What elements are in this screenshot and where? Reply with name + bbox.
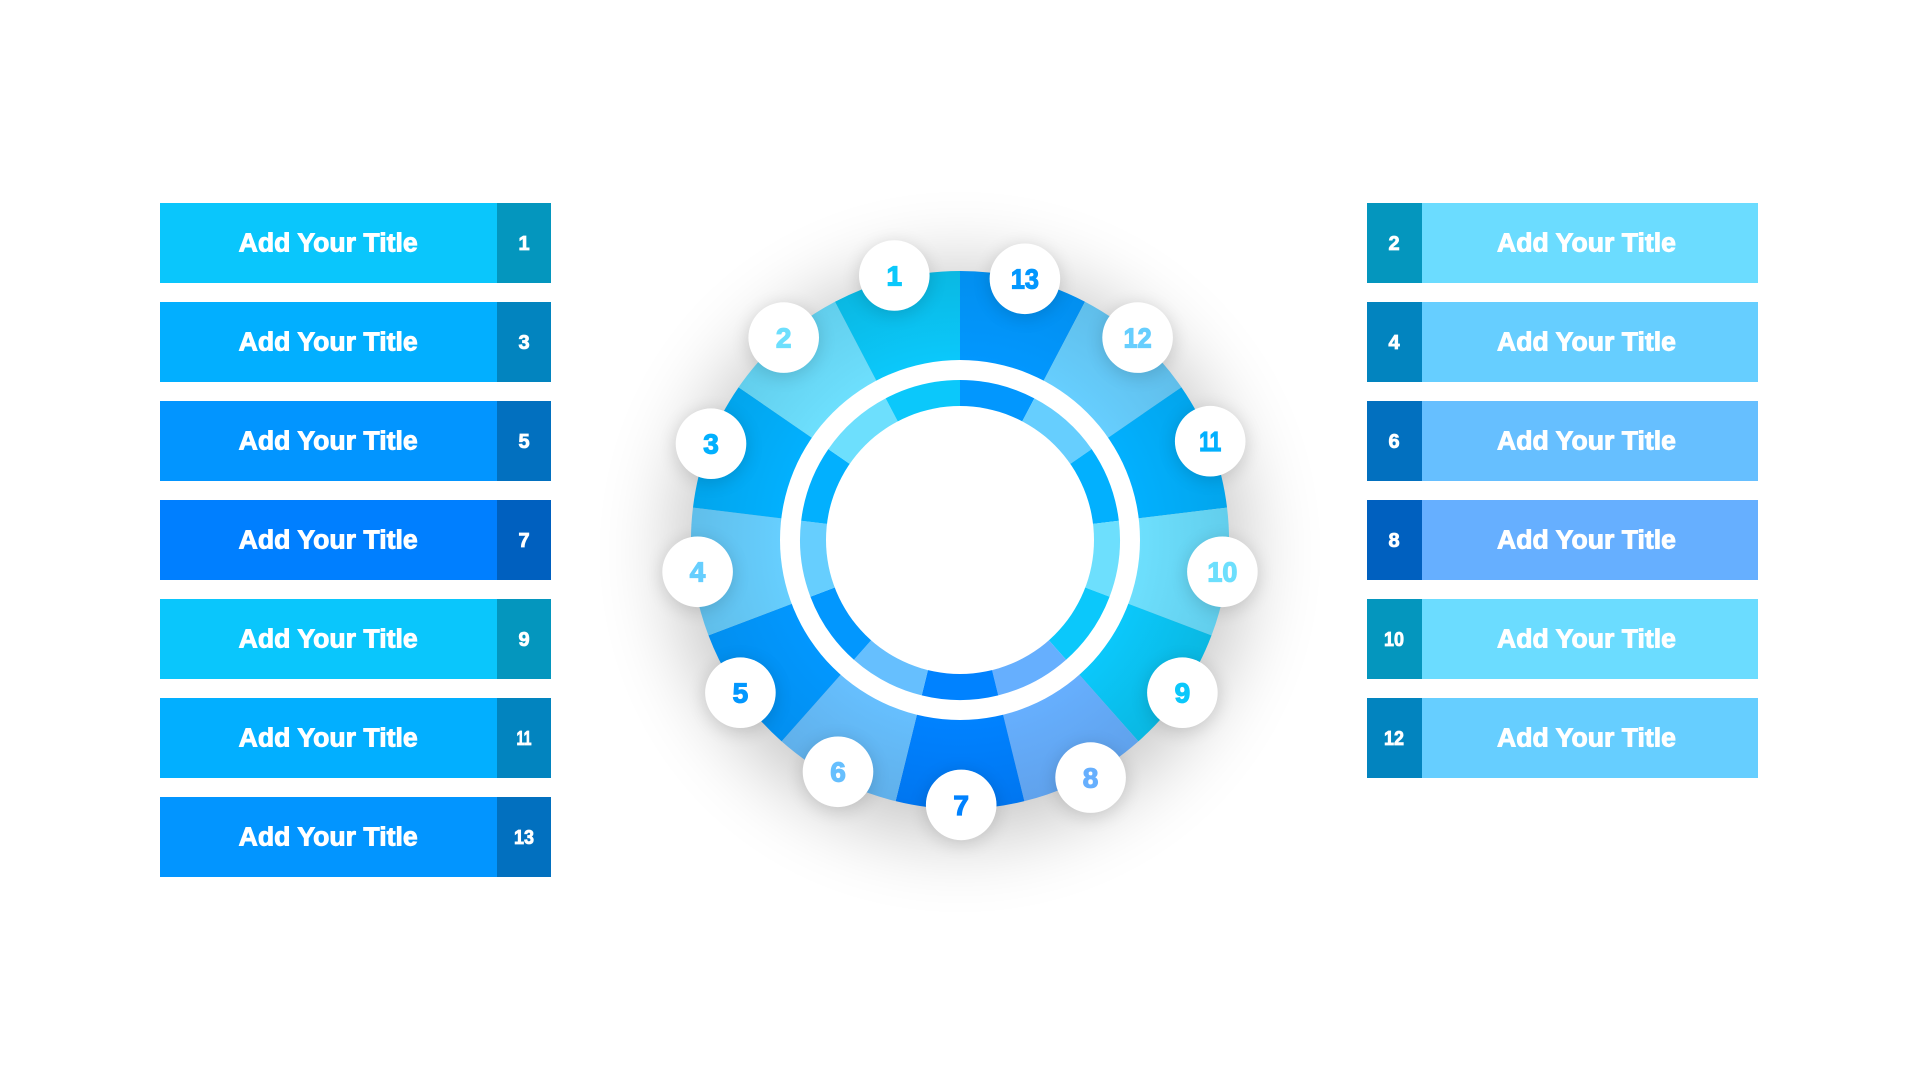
bar 3: 3 [518, 332, 530, 354]
bar 11: Add Your Title [239, 724, 418, 752]
bar 1: 1 [518, 233, 530, 255]
bar 8: 8 [1388, 530, 1400, 552]
badge 9: 9 [1175, 678, 1190, 709]
badge 13 [989, 243, 1060, 318]
panel: right title bars [1367, 203, 1758, 778]
bar 5: Add Your Title [239, 428, 418, 456]
badge 5: 5 [733, 678, 748, 709]
bar 12: Add Your Title [1497, 724, 1676, 752]
badge 13: 13 [1011, 264, 1039, 295]
panel: left title bars [160, 203, 551, 877]
badge 6: 6 [830, 757, 846, 788]
badge 11: 11 [1199, 426, 1221, 457]
badge 12 [1102, 302, 1173, 376]
badge 2: 2 [776, 322, 791, 354]
bar 4: 4 [1388, 332, 1400, 354]
badge 8: 8 [1083, 762, 1098, 794]
outer ring of 13 wedges [691, 271, 1229, 809]
badge 12: 12 [1124, 322, 1152, 354]
badge 5 [705, 657, 776, 732]
white centre circle [826, 406, 1094, 674]
badge 10: 10 [1207, 557, 1237, 588]
bar 4: Add Your Title [1497, 328, 1676, 356]
bar 3: Add Your Title [239, 328, 418, 356]
bar 2: Add Your Title [1497, 230, 1676, 258]
bar 12: 12 [1384, 728, 1404, 750]
badge 11 [1175, 406, 1246, 480]
bar 10 [1367, 599, 1758, 679]
bar 2: 2 [1388, 233, 1400, 255]
badge 3: 3 [703, 429, 719, 460]
bar 8 [1367, 500, 1758, 580]
bar 7 [160, 500, 551, 580]
badge 8 [1055, 742, 1126, 816]
badge 9 [1147, 657, 1218, 732]
bar 10: 10 [1384, 629, 1404, 651]
bar 13 [160, 797, 551, 877]
badge 6 [802, 736, 874, 810]
bar 6 [1367, 401, 1758, 481]
bar 1 [160, 203, 551, 283]
badge 7: 7 [953, 790, 969, 821]
bar 9: Add Your Title [239, 626, 418, 654]
bar 6: Add Your Title [1497, 428, 1676, 456]
badge 2 [748, 302, 819, 376]
bar 7: 7 [518, 530, 530, 552]
bar 9: 9 [518, 629, 530, 651]
bar 3 [160, 302, 551, 382]
bar 2 [1367, 203, 1758, 283]
bar 1: Add Your Title [239, 230, 418, 258]
chart: circular 13-segment diagram [662, 240, 1258, 843]
bar 8: Add Your Title [1497, 526, 1676, 554]
bar 11 [160, 698, 551, 778]
bar 9 [160, 599, 551, 679]
bar 6: 6 [1388, 431, 1400, 453]
bar 5: 5 [518, 431, 530, 453]
white separator ring [780, 360, 1140, 720]
badge 7 [926, 770, 997, 844]
badge 4: 4 [690, 557, 706, 588]
badge 1: 1 [887, 260, 902, 291]
inner ring of 13 segments [800, 380, 1120, 700]
bar 13: Add Your Title [239, 824, 418, 852]
bar 7: Add Your Title [239, 526, 418, 554]
bar 5 [160, 401, 551, 481]
bar 13: 13 [514, 827, 534, 849]
badge 3 [676, 408, 746, 482]
bar 12 [1367, 698, 1758, 778]
bar 10: Add Your Title [1497, 626, 1676, 654]
badge 1 [859, 240, 930, 314]
bar 11: 11 [516, 728, 532, 750]
badge 10 [1187, 536, 1258, 610]
badge 4 [662, 536, 733, 610]
bar 4 [1367, 302, 1758, 382]
